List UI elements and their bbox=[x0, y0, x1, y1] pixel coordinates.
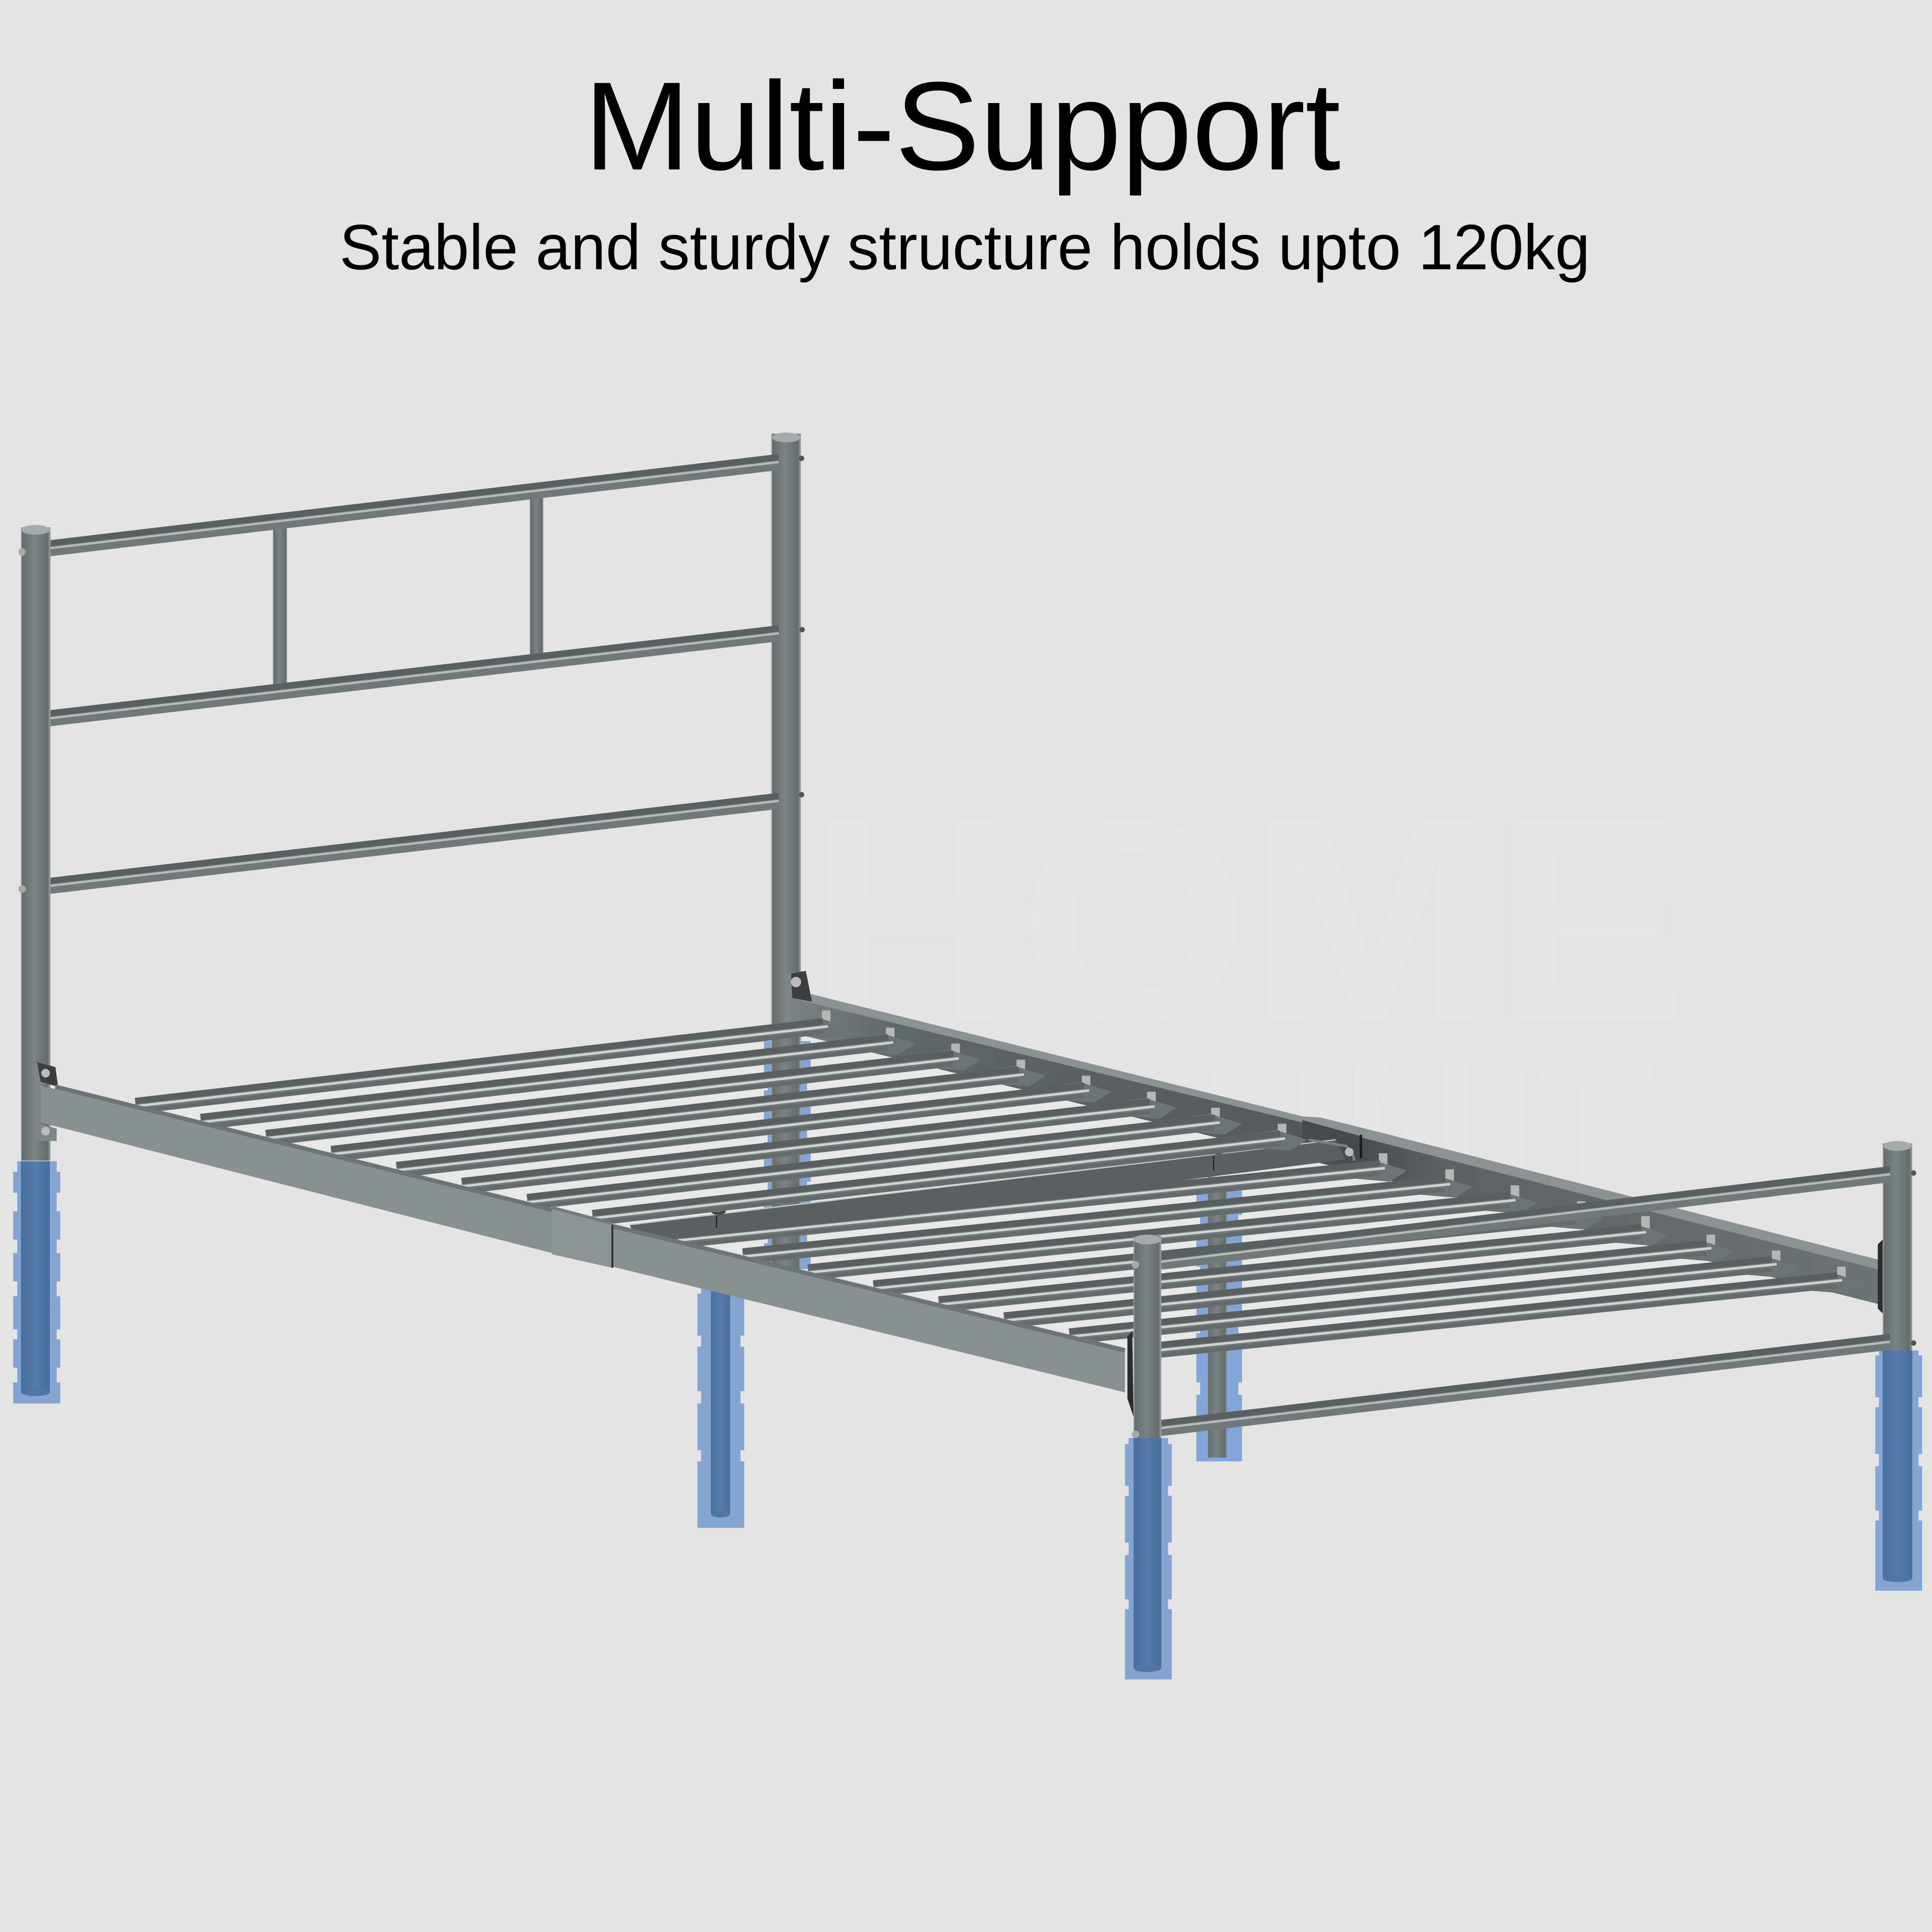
footboard rails bbox=[1160, 1170, 1890, 1428]
far foot post and leg with blue highlight bbox=[1878, 1141, 1918, 1591]
near rail foot section bbox=[612, 1225, 1125, 1392]
front left post and leg with blue highlight bbox=[17, 525, 57, 1403]
headboard vertical bar left bbox=[273, 525, 287, 690]
watermark: house mark bbox=[283, 690, 789, 1060]
slat tabs bbox=[822, 1010, 1846, 1283]
headboard vertical bar right bbox=[530, 494, 544, 659]
watermark logo bbox=[283, 690, 1689, 1219]
head bracket bbox=[785, 971, 812, 1024]
centre beam bbox=[630, 1140, 1354, 1249]
back centre leg with blue highlight bbox=[1200, 1177, 1238, 1461]
slats: head section bbox=[136, 1018, 1307, 1224]
watermark: brand word: HOME bbox=[807, 759, 1689, 1083]
foot bracket left bbox=[34, 1062, 58, 1141]
far rail inner face bbox=[791, 996, 1881, 1305]
back left leg with blue highlight bbox=[768, 432, 807, 1272]
title: Multi-Support bbox=[584, 56, 1341, 197]
subtitle: Stable and sturdy structure holds upto 120kg bbox=[340, 211, 1590, 283]
bed frame bbox=[17, 432, 1918, 1680]
headboard top rail bbox=[49, 457, 779, 548]
far side rail bbox=[785, 971, 1881, 1305]
footboard lower rail bbox=[1160, 1337, 1890, 1428]
gaps area between slats bbox=[140, 1027, 1848, 1353]
near rail head section bbox=[41, 1085, 552, 1253]
headboard middle rail bbox=[49, 629, 779, 718]
watermark: second word: UNIT bbox=[1201, 1029, 1655, 1219]
near side rail bbox=[34, 1062, 1133, 1417]
foot bracket near bbox=[1127, 1331, 1133, 1417]
front centre leg with blue highlight bbox=[701, 1286, 741, 1528]
far rail top face bbox=[791, 993, 1881, 1270]
headboard bbox=[49, 457, 779, 886]
near rail sleeve bbox=[552, 1206, 612, 1268]
slats: foot section bbox=[677, 1160, 1864, 1358]
near foot post and leg with blue highlight bbox=[1129, 1235, 1168, 1680]
headboard lower rail bbox=[49, 796, 779, 886]
far rail sleeve bbox=[1302, 1120, 1360, 1160]
footboard top rail bbox=[1160, 1170, 1890, 1262]
